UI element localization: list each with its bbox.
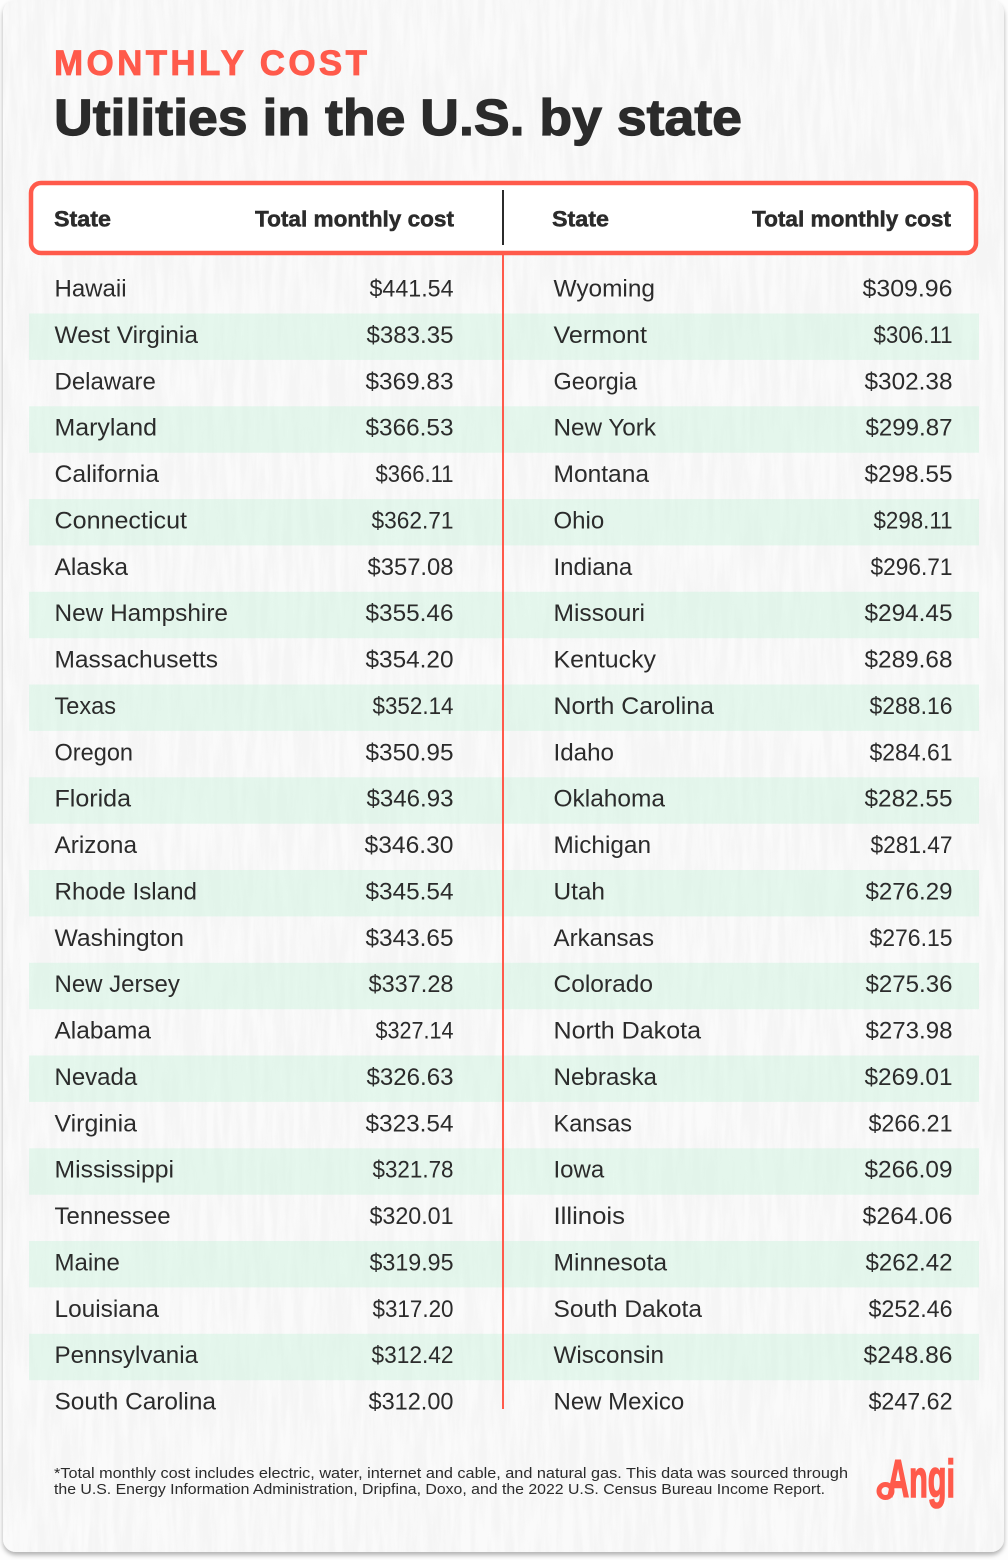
right column table rows: $276.29: [866, 878, 952, 905]
left column table rows: Pennsylvania: [54, 1342, 199, 1369]
right column table rows: $262.42: [866, 1249, 952, 1276]
left column table rows: Alabama: [54, 1018, 152, 1044]
logo: Angi: [879, 1450, 955, 1509]
right column table rows: Illinois: [554, 1203, 625, 1230]
left column table rows: $317.20: [372, 1296, 454, 1323]
left column table rows: Hawaii: [54, 276, 127, 302]
left column table rows: Maine: [54, 1249, 120, 1276]
table header: State: [54, 206, 111, 232]
left column table rows: $312.42: [372, 1342, 454, 1369]
logo: Angi: Angi: [887, 1450, 955, 1509]
right column table rows: Kentucky: [554, 646, 656, 674]
left column table rows: $346.30: [364, 832, 454, 859]
left column table rows: Texas: [54, 693, 116, 720]
right column table rows: Kansas: [554, 1110, 632, 1137]
right column table rows: $296.71: [870, 554, 952, 581]
right column table rows: Utah: [554, 878, 605, 905]
right column table rows: $298.55: [864, 461, 952, 488]
table header: [31, 183, 976, 253]
right column table rows: $299.87: [866, 415, 952, 442]
right column table rows: $284.61: [870, 739, 952, 766]
right column table rows: North Dakota: [554, 1018, 702, 1044]
right column table rows: $247.62: [868, 1388, 952, 1416]
left column table rows: $352.14: [372, 693, 454, 720]
alternating row bands: [29, 314, 979, 1380]
left column table rows: Mississippi: [54, 1157, 174, 1184]
left column table rows: South Carolina: [54, 1388, 217, 1416]
left column table rows: $350.95: [366, 739, 454, 766]
left column table rows: [54, 276, 454, 1416]
right column table rows: South Dakota: [554, 1296, 703, 1323]
left column table rows: Delaware: [54, 368, 156, 395]
right column table rows: $298.11: [874, 507, 952, 534]
right column table rows: $266.21: [868, 1110, 952, 1137]
right column table rows: $294.45: [864, 600, 952, 627]
left column table rows: Massachusetts: [54, 646, 218, 674]
right column table rows: Montana: [554, 461, 650, 488]
left column table rows: $346.93: [366, 786, 454, 813]
left column table rows: $323.54: [366, 1110, 454, 1137]
right column table rows: $309.96: [862, 276, 952, 302]
left column table rows: $343.65: [366, 925, 454, 952]
left column table rows: $320.01: [370, 1203, 454, 1230]
left column table rows: Florida: [54, 786, 132, 813]
right column table rows: Oklahoma: [554, 786, 666, 813]
left column table rows: California: [54, 461, 160, 488]
right column table rows: Arkansas: [554, 925, 654, 952]
right column table rows: [554, 276, 952, 1416]
eyebrow heading: MONTHLY COST: [54, 44, 367, 83]
right column table rows: $288.16: [870, 693, 952, 720]
right column table rows: Michigan: [554, 832, 651, 859]
left column table rows: Alaska: [54, 554, 129, 581]
left column table rows: $345.54: [366, 878, 454, 905]
left column table rows: Virginia: [54, 1110, 138, 1137]
left column table rows: Oregon: [54, 739, 133, 766]
left column table rows: New Jersey: [54, 971, 180, 998]
right column table rows: $302.38: [864, 368, 952, 395]
left column table rows: Arizona: [54, 832, 138, 859]
right column table rows: $276.15: [870, 925, 952, 952]
right column table rows: $248.86: [864, 1342, 952, 1369]
right column table rows: $266.09: [864, 1157, 952, 1184]
right column table rows: $281.47: [870, 832, 952, 859]
left column table rows: $312.00: [368, 1388, 454, 1416]
left column table rows: $327.14: [376, 1018, 454, 1044]
right column table rows: Minnesota: [554, 1249, 668, 1276]
right column table rows: New Mexico: [554, 1388, 684, 1416]
right column table rows: Wisconsin: [554, 1342, 664, 1369]
table header: Total monthly cost: [255, 206, 455, 232]
title: Utilities in the U.S. by state: [54, 89, 742, 146]
left column table rows: Nevada: [54, 1064, 138, 1091]
right column table rows: Wyoming: [554, 276, 655, 302]
right column table rows: Georgia: [554, 368, 638, 395]
footnote: the U.S. Energy Information Administration, Dripfina, Doxo, and the 2022 U.S. Census Bureau Income Report.: [54, 1481, 825, 1498]
left column table rows: $321.78: [372, 1157, 454, 1184]
right column table rows: $273.98: [866, 1018, 952, 1044]
right column table rows: New York: [554, 415, 657, 442]
right column table rows: $269.01: [864, 1064, 952, 1091]
table header: State: [552, 206, 609, 232]
right column table rows: Colorado: [554, 971, 653, 998]
right column table rows: $264.06: [862, 1203, 952, 1230]
left column table rows: $355.46: [366, 600, 454, 627]
right column table rows: Idaho: [554, 739, 614, 766]
left column table rows: $369.83: [366, 368, 454, 395]
left column table rows: $362.71: [372, 507, 454, 534]
left column table rows: West Virginia: [54, 322, 199, 349]
table header: Total monthly cost: [752, 206, 952, 232]
right column table rows: $275.36: [866, 971, 952, 998]
right column table rows: $306.11: [874, 322, 952, 349]
left column table rows: $366.53: [366, 415, 454, 442]
footnote: [54, 1465, 848, 1498]
left column table rows: $354.20: [366, 646, 454, 674]
left column table rows: $319.95: [370, 1249, 454, 1276]
left column table rows: $337.28: [368, 971, 454, 998]
right column table rows: North Carolina: [554, 693, 715, 720]
right column table rows: Vermont: [554, 322, 647, 349]
left column table rows: Rhode Island: [54, 878, 197, 905]
left column table rows: $357.08: [368, 554, 454, 581]
left column table rows: Tennessee: [54, 1203, 171, 1230]
left column table rows: $366.11: [376, 461, 454, 488]
right column table rows: $282.55: [864, 786, 952, 813]
center divider line: [502, 255, 504, 1409]
left column table rows: $441.54: [370, 276, 454, 302]
right column table rows: $289.68: [864, 646, 952, 674]
left column table rows: Louisiana: [54, 1296, 160, 1323]
right column table rows: Missouri: [554, 600, 645, 627]
footnote: *Total monthly cost includes electric, water, internet and cable, and natural gas. This data was sourced through: [54, 1465, 848, 1482]
right column table rows: Nebraska: [554, 1064, 658, 1091]
right column table rows: Ohio: [554, 507, 604, 534]
left column table rows: $326.63: [366, 1064, 454, 1091]
right column table rows: Iowa: [554, 1157, 605, 1184]
right column table rows: Indiana: [554, 554, 633, 581]
right column table rows: $252.46: [868, 1296, 952, 1323]
left column table rows: $383.35: [366, 322, 454, 349]
left column table rows: New Hampshire: [54, 600, 228, 627]
left column table rows: Washington: [54, 925, 184, 952]
left column table rows: Maryland: [54, 415, 157, 442]
left column table rows: Connecticut: [54, 507, 187, 534]
